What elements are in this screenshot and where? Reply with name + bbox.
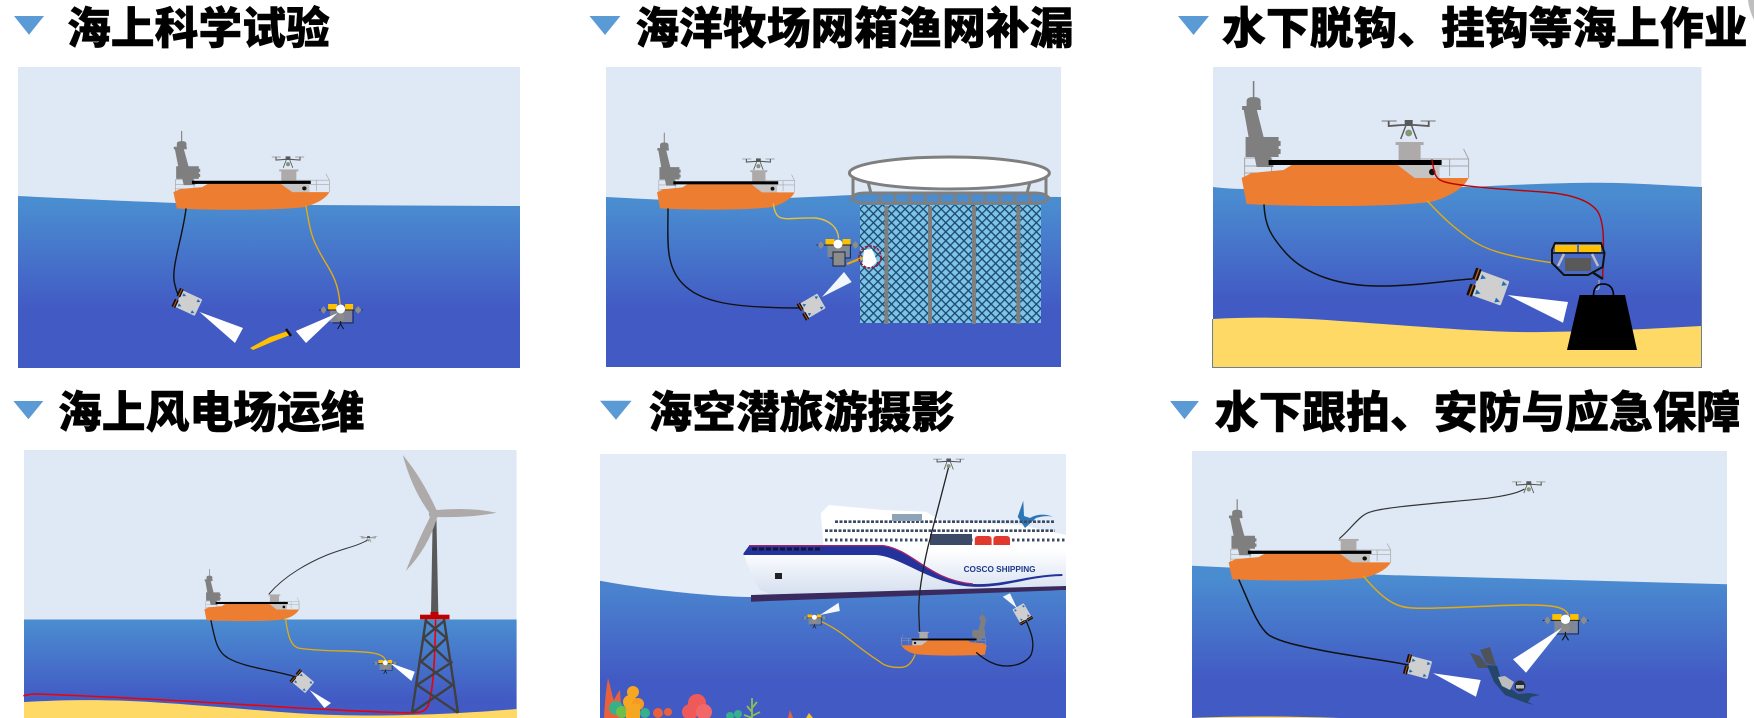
net hole [859,246,881,268]
yellow tether [822,622,915,667]
yellow AUV target [250,329,291,350]
red seabed cable [24,620,436,713]
yellow ROV [319,304,363,329]
drone [933,459,964,470]
light beam [1508,295,1568,323]
sea [1192,566,1727,718]
yellow tether [1427,201,1552,263]
heavy ROV [1552,243,1604,279]
yellow ROV [373,660,397,674]
yellow ROV [1543,614,1588,640]
diver [1470,647,1540,705]
drone [1382,120,1436,139]
sea [18,196,520,368]
light beam [822,272,852,297]
ship [204,569,299,621]
yellow tether [1364,577,1568,615]
scene background [18,67,520,368]
black tether [668,209,803,308]
seabed edge [1192,716,1340,718]
black tether [1264,205,1472,286]
coral reef [604,678,813,718]
yellow tether [306,206,340,304]
marker triangle [1178,16,1209,35]
wind turbine [403,455,497,713]
repair ROV [816,239,860,266]
yellow tether [285,618,385,660]
grey ROV [171,288,203,317]
seabed [1213,318,1701,367]
scene background [1213,67,1702,367]
heading: 海上风电场运维 [58,388,365,438]
panel: offshore wind farm maintenance [13,388,517,718]
marker triangle [1170,401,1199,419]
grey ROV [289,669,315,694]
scene background [600,454,1066,718]
ship [1242,81,1469,206]
scene background [1192,451,1727,718]
grey ROV [1466,268,1510,307]
submerged ship [901,609,987,656]
black tether [977,618,1033,666]
net cage [849,157,1049,324]
drone [360,536,377,542]
repair arm [847,257,864,264]
panel: sea and air dive tourism photography [600,388,1066,718]
ship [657,133,795,210]
heading: 海上科学试验 [67,4,330,54]
seabed [24,700,517,718]
hook and weight [1567,280,1637,350]
light beam [296,313,338,343]
drone tether [1340,489,1524,538]
corner fragment [1748,0,1754,20]
light beam [390,663,415,681]
light beam [820,603,840,615]
scene background [606,67,1061,367]
marker triangle [13,401,43,419]
hull lettering: COSCO SHIPPING [964,564,1036,574]
marker triangle [600,401,632,420]
drone tether [269,540,367,594]
drone tether [919,467,949,632]
sea [1213,183,1702,367]
light beam [1433,673,1481,697]
sea [606,195,1061,367]
yellow ROV [803,615,826,628]
drone [742,158,775,170]
black tether [174,209,186,298]
ship [173,131,329,210]
grey ROV [1012,603,1033,626]
black tether [211,621,298,678]
drone [1512,481,1546,493]
scene background [24,450,517,718]
red cable [1432,160,1603,277]
panel: ocean ranch net-cage repair [590,4,1073,367]
light beam [200,312,243,343]
drone [272,156,304,168]
panel: marine science experiment [14,4,520,368]
panel frame [1212,187,1702,368]
ship [1229,499,1391,581]
marker triangle [590,16,620,35]
grey ROV [797,293,826,321]
heading: 水下脱钩、挂钩等海上作业 [1222,4,1748,54]
heading: 海空潜旅游摄影 [648,388,955,438]
light beam [1003,593,1017,608]
yellow tether [773,204,839,238]
sea [24,620,517,718]
panel: hook release and attachment [1178,0,1754,368]
light beam [1513,628,1562,673]
heading: 水下跟拍、安防与应急保障 [1215,388,1740,438]
sea [600,581,1066,718]
heading: 海洋牧场网箱渔网补漏 [635,4,1073,54]
cruise ship [744,501,1066,602]
light beam [310,690,331,708]
marker triangle [14,16,44,35]
black tether [1239,580,1409,665]
grey ROV [1403,654,1432,680]
panel: underwater tracking, security and emergency [1170,388,1740,718]
